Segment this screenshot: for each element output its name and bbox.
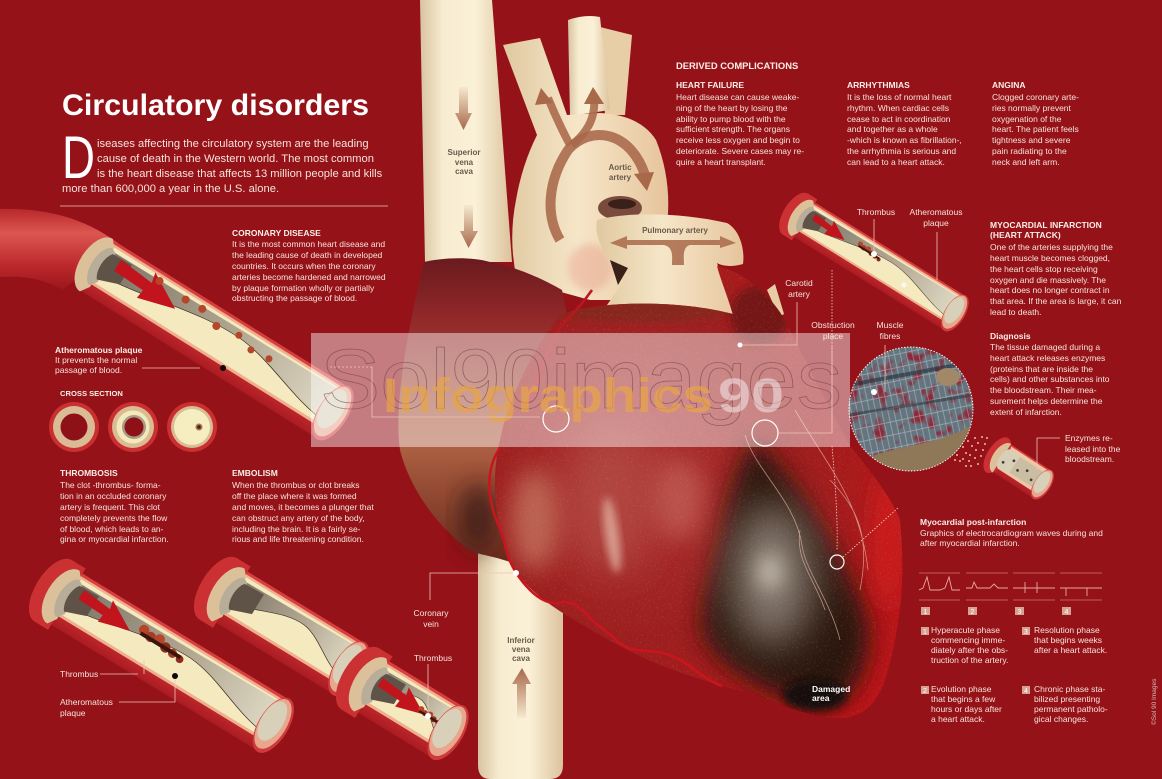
large artery cutaway [0, 209, 362, 447]
superior vena cava [420, 0, 512, 262]
title: Circulatory disorders [62, 89, 369, 122]
arrow: pulmonary flow [610, 236, 736, 265]
gap between aorta and pulmonary trunk [610, 260, 628, 285]
damaged area label: Damaged [812, 684, 850, 694]
heart: main ventricle [495, 266, 902, 718]
arrows: aortic flow [548, 95, 645, 240]
arrow: inferior vena cava flow [512, 668, 531, 718]
angina text: heart. The patient feels [992, 124, 1079, 134]
phase 3: 3 [1024, 629, 1028, 636]
enzyme artery [954, 433, 1060, 506]
angina text: tightness and severe [992, 135, 1071, 145]
intro text: iseases affecting the circulatory system are the leading [97, 138, 369, 150]
watermark band [311, 332, 850, 447]
diagnosis text: the bloodstream. Their mea- [990, 385, 1097, 395]
enzymes label: Enzymes re- [1065, 433, 1113, 443]
thrombosis text: of blood, which leads to an- [60, 524, 164, 534]
leaders [100, 219, 1060, 716]
thrombosis text: gina or myocardial infarction. [60, 534, 169, 544]
embolism artery [184, 549, 380, 707]
ECG number 3: 3 [1018, 609, 1022, 616]
arrhythmias text: rhythm. When cardiac cells [847, 103, 949, 113]
arrhythmias text: ARRHYTHMIAS [847, 80, 910, 90]
superior vena cava label: Superior [448, 148, 480, 157]
phase 2: hours or days after [931, 704, 1002, 714]
coronary disease text: the leading cause of death in developed [232, 250, 383, 260]
thrombosis text: The clot -thrombus- forma- [60, 480, 161, 490]
phase 2: a heart attack. [931, 714, 985, 724]
thrombosis artery [19, 551, 305, 764]
pulmonary artery label: Pulmonary artery [642, 226, 708, 235]
ECG number 2: 2 [971, 609, 975, 616]
heart failure text: sufficient strength. The organs [676, 124, 790, 134]
superior vena cava label: cava [455, 167, 473, 176]
angina text: Clogged coronary arte- [992, 92, 1079, 102]
myocardial infarction text: oxygen and die massively. The [990, 275, 1106, 285]
coronary disease text: obstructing the passage of blood. [232, 293, 357, 303]
heart failure text: HEART FAILURE [676, 80, 744, 90]
myocardial infarction text: (HEART ATTACK) [990, 230, 1061, 240]
phase 2: 2 [923, 688, 927, 695]
circle markers [543, 406, 844, 569]
obstruction place label: place [823, 331, 843, 341]
heart failure text: ability to pump blood with the [676, 114, 786, 124]
phase 4: permanent patholo- [1034, 704, 1108, 714]
muscle fibres label: Muscle [877, 320, 904, 330]
arrhythmias text: can lead to a heart attack. [847, 157, 945, 167]
myocardial infarction text: lead to death. [990, 307, 1042, 317]
ECG number 1 [921, 607, 930, 616]
diagnosis text: Diagnosis [990, 331, 1031, 341]
coronary vein label: Coronary [414, 608, 449, 618]
heart failure text: Heart disease can cause weake- [676, 92, 799, 102]
inferior vena cava label: vena [512, 645, 531, 654]
phase 1: truction of the artery. [931, 655, 1008, 665]
atheromatous plaque label: passage of blood. [55, 365, 122, 375]
angina text: pain radiating to the [992, 146, 1067, 156]
arrhythmias text: cease to act in coordination [847, 114, 951, 124]
cross section 3 [167, 402, 217, 452]
thrombosis text: THROMBOSIS [60, 468, 118, 478]
angina text: oxygenation of the [992, 114, 1062, 124]
thrombosis text: artery is frequent. This clot [60, 502, 161, 512]
superior vena cava label: vena [455, 158, 474, 167]
ECG number 1: 1 [924, 609, 928, 616]
cross section 1 [49, 402, 99, 452]
top right thrombus label: Thrombus [857, 207, 895, 217]
carotid artery label: Carotid [785, 278, 813, 288]
thrombosis labels: plaque [60, 708, 86, 718]
phase 4: bilized presenting [1034, 694, 1100, 704]
ECG number 3 [1015, 607, 1024, 616]
embolism text: off the place where it was formed [232, 491, 357, 501]
carotid tab [767, 284, 784, 317]
phase 1 [921, 625, 1008, 665]
damaged area label: area [812, 693, 830, 703]
ECG number 4: 4 [1065, 609, 1069, 616]
phase 3: after a heart attack. [1034, 645, 1107, 655]
intro text: cause of death in the Western world. The most common [97, 153, 374, 165]
myocardial post-infarction text: after myocardial infarction. [920, 538, 1020, 548]
diagnosis text: heart attack releases enzymes [990, 353, 1105, 363]
phase 3: that begins weeks [1034, 635, 1102, 645]
diagnosis text: surement helps determine the [990, 396, 1103, 406]
angina text: ries normally prevent [992, 103, 1072, 113]
dotted leaders from heart damage [832, 270, 898, 557]
muscle fibres label: fibres [880, 331, 900, 341]
plaque dots [172, 365, 226, 679]
phase 3 [1022, 625, 1107, 655]
heart attack artery [772, 187, 976, 339]
heart failure text: ning of the heart by losing the [676, 103, 788, 113]
arrhythmias text: the arrhythmia is serious and [847, 146, 956, 156]
phase 4: gical changes. [1034, 714, 1088, 724]
embolism text: and moves, it becomes a plunger that [232, 502, 374, 512]
phase 1: diately after the obs- [931, 645, 1008, 655]
phase 2: Evolution phase [931, 684, 992, 694]
phase 4 [1022, 684, 1108, 724]
ECG number 2 [968, 607, 977, 616]
phase 1: commencing imme- [931, 635, 1005, 645]
arrhythmias text: and together as a whole [847, 124, 938, 134]
leader dots [425, 251, 906, 719]
myocardial infarction text: the heart cells stop receiving [990, 264, 1098, 274]
embolism text: including the brain. It is a fairly se- [232, 524, 361, 534]
ECG graphs [919, 573, 1102, 600]
thrombosis labels: Atheromatous [60, 697, 113, 707]
aorta with branches [503, 16, 668, 300]
thrombosis labels: Thrombus [60, 669, 98, 679]
top right plaque label: plaque [923, 218, 949, 228]
derived complications heading: DERIVED COMPLICATIONS [676, 60, 798, 71]
aortic artery label: Aortic [608, 163, 632, 172]
pulmonary artery [596, 214, 743, 315]
top right plaque label: Atheromatous [910, 207, 962, 217]
heart failure text: deteriorate. Severe cases may re- [676, 146, 804, 156]
ECG number 4 [1062, 607, 1071, 616]
heart: right atrium lobe [398, 258, 570, 562]
phase 4: Chronic phase sta- [1034, 684, 1106, 694]
enzyme particles [954, 436, 988, 467]
coronary disease text: countries. It occurs when the coronary [232, 261, 376, 271]
myocardial post-infarction text: Graphics of electrocardiogram waves during and [920, 528, 1103, 538]
phase 1: Hyperacute phase [931, 625, 1000, 635]
inferior vena cava [478, 540, 563, 779]
myocardial post-infarction text: Myocardial post-infarction [920, 517, 1026, 527]
coronary disease text: by plaque formation wholly or partially [232, 283, 375, 293]
atheromatous plaque label: It prevents the normal [55, 355, 137, 365]
phase 4: 4 [1024, 688, 1028, 695]
embolism text: rious and life threatening condition. [232, 534, 364, 544]
embolism text: When the thrombus or clot breaks [232, 480, 360, 490]
copyright credit: ©Sol 90 Images [1150, 678, 1158, 725]
atheromatous plaque label: Atheromatous plaque [55, 345, 143, 355]
angina text: ANGINA [992, 80, 1026, 90]
thrombosis text: tion in an occluded coronary [60, 491, 167, 501]
heart failure text: receive less oxygen and begin to [676, 135, 800, 145]
carotid artery label: artery [788, 289, 811, 299]
arrow: superior flow lower [460, 205, 478, 248]
phase 3: Resolution phase [1034, 625, 1100, 635]
phase 2: that begins a few [931, 694, 996, 704]
cross section 2 [108, 402, 158, 452]
intro text: is the heart disease that affects 13 million people and kills [97, 168, 383, 180]
cross section heading: CROSS SECTION [60, 389, 123, 398]
coronary disease text: It is the most common heart disease and [232, 239, 385, 249]
angina text: neck and left arm. [992, 157, 1060, 167]
aortic artery label: artery [609, 173, 632, 182]
intro text: more than 600,000 a year in the U.S. alone. [62, 183, 279, 195]
intro drop cap: D [62, 124, 95, 191]
thrombosis text: completely prevents the flow [60, 513, 168, 523]
coronary disease text: arteries become hardened and narrowed [232, 272, 386, 282]
arrhythmias text: -which is known as fibrillation-, [847, 135, 962, 145]
embolism text: EMBOLISM [232, 468, 278, 478]
myocardial infarction text: heart does no longer contract in [990, 285, 1110, 295]
coronary vein label: vein [423, 619, 439, 629]
diagnosis text: (proteins that are inside the [990, 364, 1093, 374]
arrow: superior flow upper [455, 87, 472, 130]
heart [398, 258, 910, 730]
diagnosis text: extent of infarction. [990, 407, 1062, 417]
pale branch vessels [745, 410, 868, 640]
embolism thrombus label: Thrombus [414, 653, 452, 663]
coronary artery root [530, 290, 592, 400]
myocardial infarction text: that area. If the area is large, it can [990, 296, 1122, 306]
myocardial infarction text: heart muscle becomes clogged, [990, 253, 1110, 263]
myocardial infarction text: MYOCARDIAL INFARCTION [990, 220, 1102, 230]
inferior vena cava label: cava [512, 654, 530, 663]
diagnosis text: The tissue damaged during a [990, 342, 1100, 352]
watermark outline text: Sol90images [320, 332, 842, 426]
diagnosis text: cells) and other substances into [990, 374, 1110, 384]
phase 1: 1 [923, 629, 927, 636]
enzymes label: leased into the [1065, 444, 1121, 454]
enzymes label: bloodstream. [1065, 454, 1114, 464]
watermark pale 90: 90 [718, 370, 784, 423]
myocardial infarction text: One of the arteries supplying the [990, 242, 1113, 252]
coronary disease heading: CORONARY DISEASE [232, 228, 321, 238]
embolism text: can obstruct any artery of the body, [232, 513, 365, 523]
embolism artery detached end [326, 639, 480, 771]
muscle fibres magnified circle [849, 347, 973, 471]
watermark orange text: Infographics [383, 370, 713, 423]
divider [60, 205, 388, 207]
obstruction place label: Obstruction [811, 320, 855, 330]
heart failure text: quire a heart transplant. [676, 157, 766, 167]
phase 2 [921, 684, 1002, 724]
arrhythmias text: It is the loss of normal heart [847, 92, 952, 102]
inferior vena cava label: Inferior [507, 636, 535, 645]
coronary vein [489, 448, 722, 686]
